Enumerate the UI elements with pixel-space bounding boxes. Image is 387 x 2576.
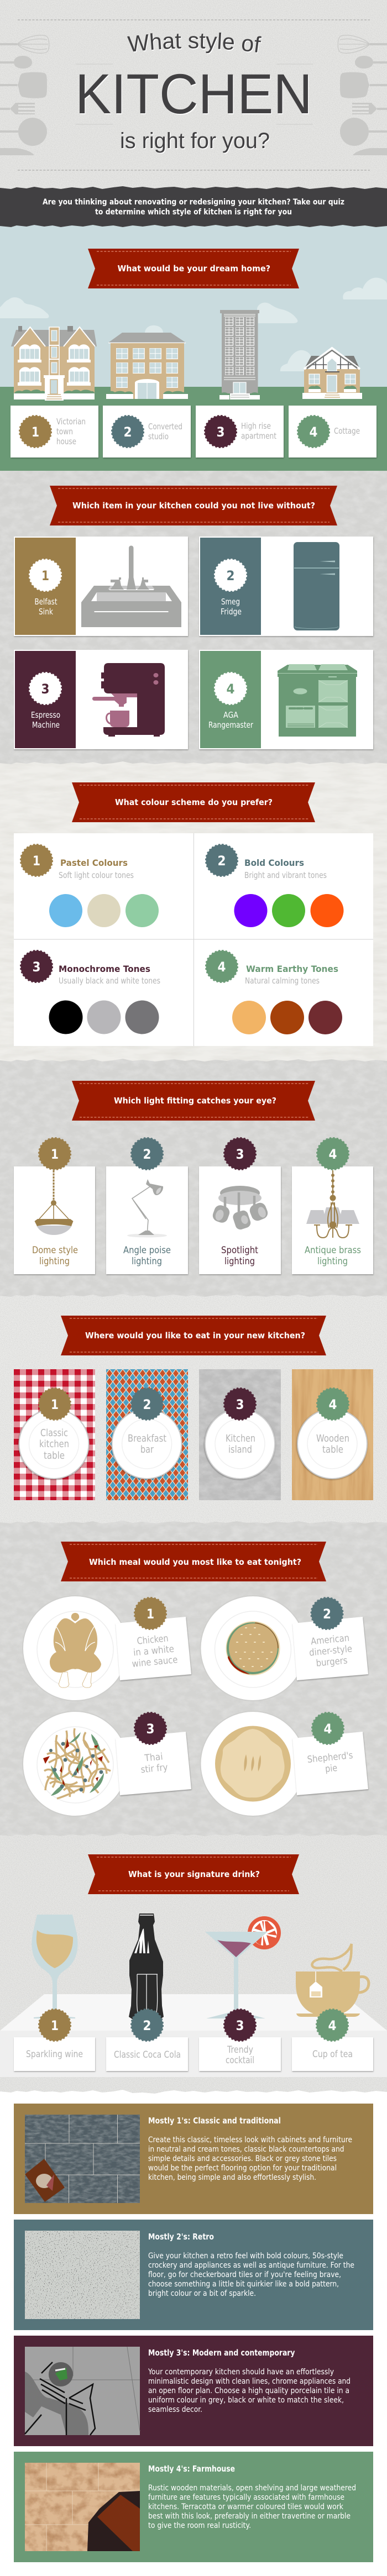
option: dome style lighting: lighting: [39, 1256, 70, 1267]
section background: results: [0, 2090, 387, 2576]
option: thai stir fry: [23, 1711, 191, 1816]
icon: cocktail: [205, 1916, 281, 2018]
result: mostly 4s: kitchens. Terracotta or warmer coloured tiles would work: [148, 2503, 344, 2511]
result: mostly 4s: to give the room real rusticity.: [148, 2521, 251, 2530]
icons: utensils left: [0, 35, 49, 155]
option card 1: house: [56, 437, 76, 446]
house: victorian town house: [11, 326, 97, 401]
clouds: [0, 277, 387, 371]
result: mostly 1s: would be the perfect flooring option for your traditional: [148, 2164, 337, 2173]
panel: belfast sink: 1: [41, 568, 49, 583]
option: warm earthy tones: Warm Earthy Tones: [246, 964, 338, 974]
option card 2: studio: [148, 432, 169, 441]
photo: slate tiles: [25, 2115, 140, 2203]
option card 1: Victorian: [56, 417, 86, 427]
option: spotlight lighting: Spotlight: [221, 1245, 258, 1256]
banner: drink: What is your signature drink?: [128, 1869, 260, 1879]
house: high rise apartment: [219, 310, 260, 399]
option: bold colours: 2: [218, 853, 226, 869]
panel: belfast sink: Belfast: [34, 597, 57, 607]
header background: [0, 0, 387, 191]
option: monochrome tones: Monochrome Tones: [59, 964, 150, 974]
option: kitchen island: 3: [236, 1397, 244, 1412]
icon: spotlight fitting: [211, 1186, 270, 1231]
option: spotlight lighting: [199, 1138, 281, 1274]
result: mostly 1s: [14, 2104, 373, 2214]
option card 1: [11, 406, 98, 458]
result: mostly 3s: minimalistic design with clean lines, chrome appliances and: [148, 2377, 351, 2386]
option: wooden table: table: [322, 1444, 343, 1455]
banner: meal: Which meal would you most like to eat tonight?: [89, 1557, 301, 1567]
icon: cola bottle: [129, 1913, 164, 2019]
section background: colour scheme: [0, 761, 387, 1064]
result: mostly 4s: [14, 2452, 373, 2562]
option: cup of tea: 4: [328, 2018, 336, 2033]
option: wooden table: [292, 1369, 373, 1500]
house: converted studio: [106, 333, 188, 399]
icon: aga range cooker: [278, 664, 357, 737]
option: american diner-style burgers: [200, 1596, 368, 1701]
sky and ground: [0, 224, 387, 471]
panel: colour options: [14, 833, 373, 1046]
option: classic kitchen table: table: [44, 1450, 65, 1462]
icon: wine glass: [32, 1915, 78, 2018]
icon: burger: [226, 1621, 280, 1675]
option card 2: [103, 406, 191, 458]
intro band: [0, 186, 387, 227]
option: wooden table: 4: [328, 1397, 337, 1412]
option: wooden table: Wooden: [316, 1433, 349, 1444]
option card 1: 1: [32, 424, 39, 440]
banner: eating place: Where would you like to eat in your new kitchen?: [85, 1331, 305, 1340]
option: american diner-style burgers: diner-style: [308, 1643, 353, 1659]
option: classic kitchen table: 1: [51, 1397, 59, 1412]
panel: aga rangemaster: Rangemaster: [208, 720, 254, 730]
option: cup of tea: [292, 2009, 373, 2071]
title: [75, 32, 312, 154]
option: classic kitchen table: kitchen: [39, 1439, 69, 1450]
result: mostly 4s: Rustic wooden materials, open shelving and large weathered: [148, 2484, 356, 2493]
banner: meal: [61, 1542, 326, 1581]
panel: smeg fridge: 2: [227, 568, 234, 583]
photo: speckled quartz: [25, 2231, 140, 2319]
option: shepherd's pie: 4: [324, 1721, 332, 1737]
result: mostly 3s: Mostly 3's: Modern and contemporary: [148, 2348, 295, 2358]
photo: grey porcelain with chair: [25, 2347, 140, 2435]
option card 4: 4: [310, 424, 317, 440]
icons: utensils right: [338, 35, 387, 155]
option: antique brass lighting: [292, 1138, 373, 1274]
banner: colour scheme: [72, 782, 315, 822]
option: warm earthy tones: 4: [218, 959, 226, 975]
option: trendy cocktail: 3: [236, 2018, 244, 2033]
option card 2: 2: [124, 424, 132, 440]
result: mostly 4s: best with this look, preferably in either travertine or marble: [148, 2512, 351, 2521]
result: mostly 3s: an open floor plan. Choose a high quality porcelain tile in a: [148, 2386, 349, 2395]
result: mostly 2s: crockery and appliances as well as antique furniture. For the: [148, 2261, 354, 2270]
option cards: drinks: [14, 2009, 373, 2071]
option: dome style lighting: Dome style: [32, 1245, 78, 1256]
option: warm earthy tones: [206, 950, 342, 1034]
option: shepherd's pie: [200, 1711, 368, 1816]
title: KITCHEN: [75, 62, 312, 125]
option card 1: town: [56, 427, 73, 437]
option: pastel colours: 1: [33, 853, 40, 869]
option: antique brass lighting: lighting: [317, 1256, 348, 1267]
result: mostly 1s: simple details and accessories. Black or grey stone tiles: [148, 2154, 337, 2163]
section background: eating place: [0, 1294, 387, 1525]
option: spotlight lighting: 3: [236, 1147, 244, 1162]
option: bold colours: Bold Colours: [244, 858, 304, 868]
result: mostly 4s: furniture are features typically associated with farmhouse: [148, 2493, 344, 2502]
panel: aga rangemaster: [199, 650, 373, 749]
option: breakfast bar: [106, 1369, 188, 1500]
section background: meal: [0, 1521, 387, 1840]
option: pastel colours: Soft light colour tones: [59, 870, 134, 880]
option: monochrome tones: 3: [32, 959, 41, 975]
panel: belfast sink: [14, 537, 188, 636]
panel: belfast sink: Sink: [39, 607, 53, 617]
option: antique brass lighting: 4: [328, 1147, 337, 1162]
option: classic coca cola: [106, 2009, 188, 2071]
option: thai stir fry: 3: [146, 1721, 155, 1737]
option: breakfast bar: bar: [140, 1444, 154, 1455]
option card 3: 3: [217, 424, 224, 440]
banner: lighting: [72, 1081, 315, 1121]
icon: cup of tea: [296, 1944, 369, 2017]
option: kitchen island: [199, 1369, 281, 1500]
result: mostly 3s: uniform colour in grey, black or white to match the sleek,: [148, 2396, 344, 2405]
icon: roast chicken: [50, 1613, 101, 1687]
option: bold colours: Bright and vibrant tones: [244, 870, 327, 880]
option: sparkling wine: 1: [51, 2018, 59, 2033]
option: american diner-style burgers: American: [310, 1633, 350, 1647]
panel: smeg fridge: [199, 537, 373, 636]
title: What style of: [127, 32, 262, 54]
result: mostly 4s: Mostly 4's: Farmhouse: [148, 2464, 235, 2474]
panel: espresso machine: 3: [41, 681, 50, 697]
option: sparkling wine: [14, 2009, 95, 2071]
option: trendy cocktail: Trendy: [227, 2044, 253, 2055]
option: cup of tea: Cup of tea: [312, 2049, 353, 2060]
result: mostly 3s: seamless decor.: [148, 2405, 202, 2414]
title: is right for you?: [120, 129, 270, 153]
option: pastel colours: [21, 844, 159, 927]
icon: angle poise lamp: [127, 1179, 167, 1238]
section background: lighting: [0, 1059, 387, 1298]
panel: smeg fridge: Fridge: [221, 607, 242, 617]
option: angle poise lighting: 2: [143, 1147, 151, 1162]
option card 4: Cottage: [334, 426, 360, 436]
icon: chandelier: [306, 1170, 359, 1238]
option: classic kitchen table: Classic: [40, 1428, 68, 1439]
option: breakfast bar: Breakfast: [128, 1433, 166, 1444]
option: angle poise lighting: [106, 1138, 188, 1274]
option card 4: [289, 406, 376, 458]
option: chicken in a white wine sauce: 1: [147, 1606, 154, 1622]
option card 2: Converted: [148, 422, 182, 432]
panel: espresso machine: Machine: [32, 720, 60, 730]
option: chicken in a white wine sauce: Chicken: [137, 1633, 169, 1647]
panel: espresso machine: [14, 650, 188, 749]
icon: stir fry noodles: [43, 1728, 111, 1799]
option: dome style lighting: 1: [51, 1147, 59, 1162]
intro text: [43, 198, 344, 217]
panel: aga rangemaster: AGA: [223, 710, 239, 720]
banner: dream home: What would be your dream home?: [117, 264, 270, 274]
option: angle poise lighting: Angle poise: [123, 1245, 171, 1256]
banner: colour scheme: What colour scheme do you prefer?: [115, 797, 273, 807]
option: american diner-style burgers: burgers: [316, 1655, 348, 1669]
photo: travertine tiles with rug: [25, 2463, 140, 2551]
option: bold colours: [206, 844, 344, 927]
option card 3: [196, 406, 284, 458]
panel: aga rangemaster: 4: [227, 681, 234, 697]
result: mostly 1s: Create this classic, timeless look with cabinets and furniture: [148, 2136, 352, 2144]
result: mostly 2s: choose something a little bit quirkier like a bold pattern,: [148, 2280, 339, 2289]
option: monochrome tones: Usually black and white tones: [59, 976, 160, 986]
banner: drink: [88, 1854, 299, 1894]
icon: pie: [215, 1726, 291, 1801]
option: monochrome tones: [21, 950, 160, 1034]
icon: fridge: [294, 542, 339, 630]
result: mostly 1s: Mostly 1's: Classic and traditional: [148, 2116, 281, 2126]
section background: kitchen item: [0, 471, 387, 766]
icon: espresso machine: [92, 663, 165, 737]
option: sparkling wine: Sparkling wine: [26, 2049, 83, 2060]
icon: sink: [81, 546, 181, 627]
option: spotlight lighting: lighting: [224, 1256, 255, 1267]
result: mostly 1s: kitchen, being simple and also effortlessly stylish.: [148, 2173, 316, 2182]
result: mostly 2s: floor, go for checkerboard tiles or if you're feeling brave,: [148, 2270, 341, 2279]
option: kitchen island: Kitchen: [226, 1433, 255, 1444]
option card 3: apartment: [241, 431, 276, 441]
option: thai stir fry: stir fry: [140, 1762, 168, 1775]
option: chicken in a white wine sauce: in a white: [133, 1643, 175, 1658]
option: trendy cocktail: cocktail: [226, 2055, 254, 2066]
option: shepherd's pie: pie: [325, 1763, 338, 1775]
result: mostly 3s: [14, 2336, 373, 2446]
option: chicken in a white wine sauce: [23, 1596, 191, 1701]
header rules and title block: [18, 19, 370, 171]
option: chicken in a white wine sauce: wine sauce: [132, 1654, 178, 1670]
option: shepherd's pie: Shepherd's: [307, 1750, 353, 1765]
result: mostly 2s: [14, 2220, 373, 2330]
intro text: Are you thinking about renovating or redesigning your kitchen? Take our quiz: [43, 198, 344, 207]
house: cottage: [302, 348, 362, 399]
option: antique brass lighting: Antique brass: [305, 1245, 361, 1256]
panel: smeg fridge: Smeg: [221, 597, 240, 607]
banner: kitchen item: Which item in your kitchen could you not live without?: [72, 501, 315, 511]
option: kitchen island: island: [228, 1444, 252, 1455]
table: [0, 1994, 387, 2077]
option card 3: High rise: [241, 421, 271, 431]
option: breakfast bar: 2: [143, 1397, 151, 1412]
result: mostly 2s: Give your kitchen a retro feel with bold colours, 50s-style: [148, 2252, 343, 2260]
result: mostly 3s: Your contemporary kitchen should have an effortlessly: [148, 2368, 334, 2377]
banner: kitchen item: [50, 486, 337, 525]
option: classic coca cola: 2: [143, 2018, 151, 2033]
option: american diner-style burgers: 2: [323, 1606, 331, 1622]
option: classic coca cola: Classic Coca Cola: [114, 2049, 181, 2060]
result: mostly 2s: bright colour or a bit of sparkle.: [148, 2289, 256, 2298]
banner: eating place: [61, 1316, 326, 1355]
banner: lighting: Which light fitting catches your eye?: [114, 1096, 276, 1106]
result: mostly 2s: Mostly 2's: Retro: [148, 2232, 214, 2242]
intro text: to determine which style of kitchen is right for you: [95, 208, 292, 217]
option: dome style lighting: [14, 1138, 95, 1274]
panel: espresso machine: Espresso: [31, 710, 60, 720]
icon: dome light: [34, 1170, 73, 1235]
banner: dream home: [88, 249, 299, 288]
result: mostly 1s: in neutral and cream tones, classic black countertops and: [148, 2145, 344, 2154]
option: trendy cocktail: [199, 2009, 281, 2071]
option: classic kitchen table: [14, 1369, 95, 1500]
options: dream home: [11, 406, 376, 458]
option: angle poise lighting: lighting: [132, 1256, 162, 1267]
option: warm earthy tones: Natural calming tones: [245, 976, 320, 986]
section background: drink: [0, 1833, 387, 2094]
option: pastel colours: Pastel Colours: [60, 858, 128, 868]
option: thai stir fry: Thai: [144, 1751, 163, 1764]
